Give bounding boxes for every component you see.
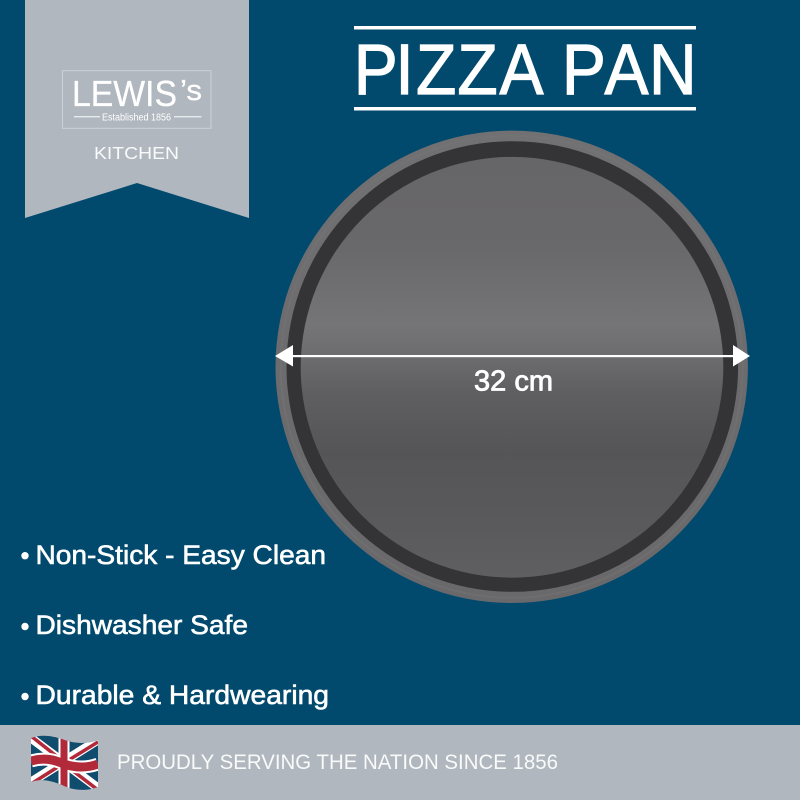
logo: Lewis's Established 1856: LEWIS: [72, 73, 177, 114]
diameter arrow: [275, 345, 750, 366]
title: Pizza Pan: PIZZA PAN: [354, 29, 697, 110]
feature: dishwasher safe: Dishwasher Safe: [36, 610, 248, 640]
pizza pan product image: [276, 131, 748, 603]
ribbon banner: [25, 0, 249, 218]
icon: union jack flag: [31, 736, 98, 790]
feature: non-stick: Non-Stick - Easy Clean: [36, 540, 326, 570]
feature: durable: Durable & Hardwearing: [36, 680, 329, 710]
logo: Lewis's Established 1856: Established 1856: [102, 112, 171, 124]
logo: Kitchen: KITCHEN: [94, 143, 179, 163]
footer slogan: PROUDLY SERVING THE NATION SINCE 1856: [117, 751, 558, 774]
logo: Lewis's Established 1856: [62, 71, 211, 128]
feature list: [21, 540, 329, 710]
logo: Lewis's Established 1856: ’s: [180, 75, 202, 107]
diameter label: 32 cm: [474, 366, 553, 398]
footer band: [0, 725, 800, 800]
